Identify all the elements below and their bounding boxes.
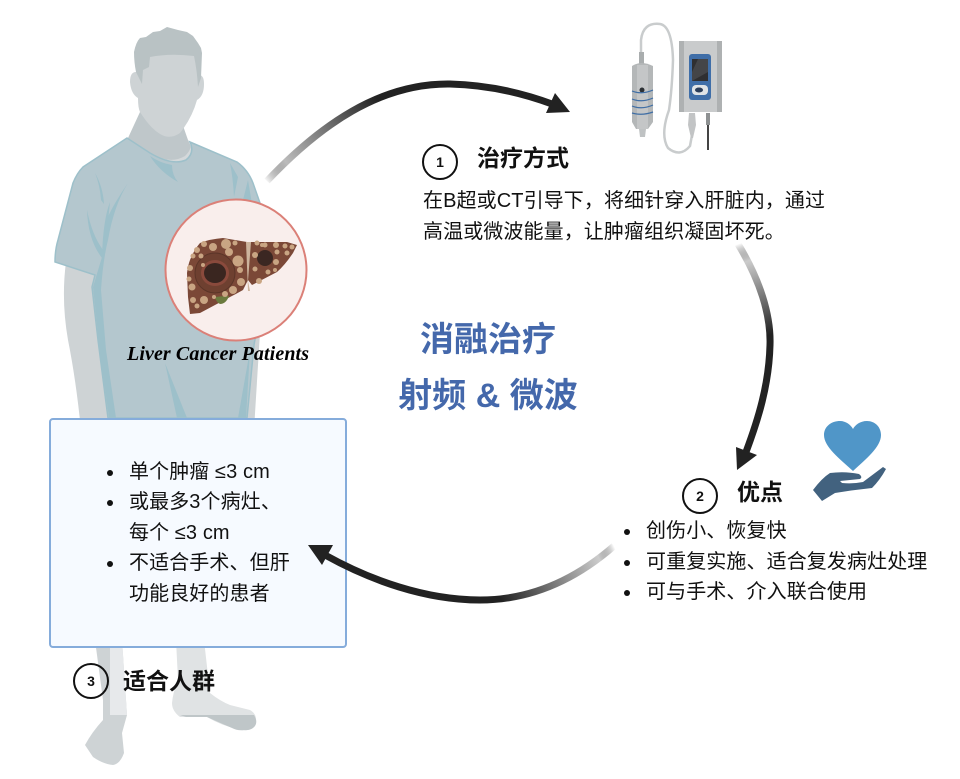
- step 1 heading: 治疗方式: [477, 145, 569, 171]
- arrow: to treatment method: [267, 84, 570, 181]
- arrow: to advantages: [736, 244, 770, 470]
- step 3 heading: 适合人群: [123, 668, 215, 694]
- icon: heart in hand: [813, 421, 886, 501]
- step 2 number: [682, 478, 718, 514]
- step 2 advantages list: 可重复实施、适合复发病灶处理: [646, 551, 927, 573]
- criteria list: [107, 461, 290, 605]
- title: ablation therapy: 射频 & 微波: [398, 377, 578, 415]
- patient arms: [64, 262, 110, 430]
- step 1 description: 高温或微波能量，让肿瘤组织凝固坏死。: [423, 221, 785, 243]
- criteria list: 不适合手术、但肝: [129, 552, 290, 574]
- step 2 advantages list: 可与手术、介入联合使用: [646, 581, 867, 603]
- icon: patient body: [55, 27, 280, 765]
- icon: ablation device: [632, 24, 722, 153]
- step 2 number: 2: [696, 488, 704, 504]
- patient shirt: [55, 138, 280, 418]
- criteria list: 或最多3个病灶、: [129, 491, 281, 513]
- title: ablation therapy: [398, 321, 578, 415]
- criteria list: 功能良好的患者: [129, 583, 270, 605]
- device probe: [632, 52, 653, 137]
- step 3 number: 3: [87, 673, 95, 689]
- step 1 description: 在B超或CT引导下，将细针穿入肝脏内，通过: [423, 190, 825, 212]
- step 1 number: [422, 144, 458, 180]
- patient neck and head: [128, 27, 204, 164]
- panel: suitable patients: [49, 418, 347, 648]
- step 2 advantages list: [624, 520, 927, 603]
- icon: liver in circle: [166, 200, 306, 340]
- step 3 number: [73, 663, 109, 699]
- criteria list: 单个肿瘤 ≤3 cm: [129, 461, 270, 483]
- criteria list: 每个 ≤3 cm: [129, 522, 230, 544]
- step 2 advantages list: 创伤小、恢复快: [646, 520, 787, 542]
- liver: [186, 238, 297, 314]
- patient legs and feet: [85, 640, 256, 765]
- label: Liver Cancer Patients: Liver Cancer Patients: [127, 343, 309, 365]
- step 2 heading: 优点: [737, 479, 783, 505]
- device console: [679, 41, 722, 150]
- step 1 number: 1: [436, 154, 444, 170]
- title: ablation therapy: 消融治疗: [420, 321, 556, 359]
- step 1 description: [423, 190, 825, 243]
- device cable: [641, 24, 692, 153]
